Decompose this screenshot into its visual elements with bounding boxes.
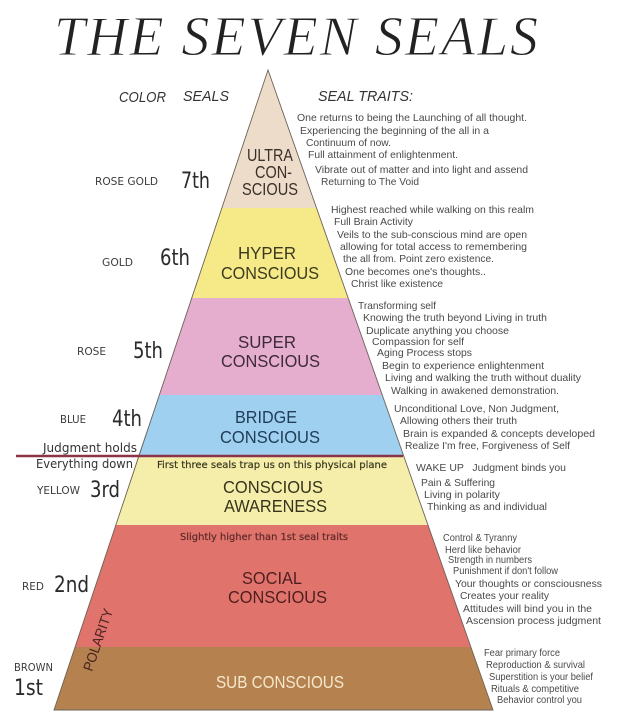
traits: 3rd seal [416,463,566,513]
traits: 7th seal: Continuum of now. [306,138,391,149]
traits: 2nd seal: Creates your reality [460,591,550,602]
traits: 3rd seal: WAKE UP Judgment binds you [416,463,566,474]
band: ultra conscious: ULTRA [247,145,293,165]
band: ultra conscious: SCIOUS [242,179,298,199]
seal 6 label: 6th [160,246,190,271]
band: conscious awareness: CONSCIOUS [223,477,323,497]
band: hyper conscious: CONSCIOUS [221,263,319,283]
traits: 6th seal [331,205,534,290]
band: conscious awareness: AWARENESS [224,496,327,516]
traits: 1st seal: Fear primary force [484,648,560,659]
traits: 3rd seal: Thinking as and individual [427,502,547,513]
traits: 4th seal: Allowing others their truth [400,416,517,427]
seal 4 label: 4th [112,407,142,432]
traits: 6th seal: the all from. Point zero existence. [343,254,494,265]
seal 1 label: 1st [14,676,43,701]
seal 3 label: 3rd [90,478,120,503]
seal 6 label: GOLD [102,256,133,269]
title: THE SEVEN SEALS [54,6,538,68]
traits: 5th seal: Knowing the truth beyond Living in truth [363,313,547,324]
seal 2 label [22,573,89,598]
pyramid edges [54,70,493,710]
column headers: COLOR [119,89,166,106]
traits: 5th seal [358,301,582,397]
judgment labels: Judgment holds [42,440,137,455]
band: social conscious: CONSCIOUS [228,587,327,607]
seal 2 label: RED [22,580,44,593]
traits: 6th seal: Full Brain Activity [334,217,414,228]
traits: 7th seal: Experiencing the beginning of the all in a [300,126,489,137]
traits: 6th seal: Highest reached while walking on this realm [331,205,534,216]
seal 1 label: BROWN [14,661,53,674]
band: super conscious: SUPER [238,332,296,352]
band: conscious awareness: First three seals trap us on this physical plane [157,460,387,471]
traits: 1st seal: Reproduction & survival [486,660,585,671]
traits: 6th seal: allowing for total access to remembering [340,242,527,253]
polarity label: POLARITY [80,606,116,673]
traits: 5th seal: Begin to experience enlightenment [382,361,544,372]
seal 2 label: 2nd [54,573,89,598]
band: super conscious: CONSCIOUS [221,351,320,371]
band: super conscious [159,298,382,395]
traits: 2nd seal [443,533,602,627]
traits: 2nd seal: Strength in numbers [448,555,532,566]
band: bridge conscious [138,395,404,456]
column headers: SEAL TRAITS: [318,88,413,105]
judgment labels: Everything down [36,456,133,471]
traits: 3rd seal: Living in polarity [424,490,501,501]
band: social conscious [75,525,471,647]
traits: 2nd seal: Attitudes will bind you in the [463,604,592,615]
traits: 5th seal: Living and walking the truth without duality [385,373,582,384]
band: bridge conscious: BRIDGE [235,407,297,427]
traits: 4th seal: Unconditional Love, Non Judgment, [394,404,559,415]
seal 7 label [95,169,210,194]
band: sub conscious: SUB CONSCIOUS [216,672,344,692]
band: hyper conscious [192,208,348,298]
traits: 1st seal: Rituals & competitive [491,684,579,695]
band: bridge conscious: CONSCIOUS [220,427,320,447]
traits: 7th seal: Vibrate out of matter and into light and assend [315,165,528,176]
traits: 2nd seal: Ascension process judgment [466,616,601,627]
traits: 2nd seal: Your thoughts or consciousness [455,579,602,590]
seal 5 label: ROSE [77,345,106,358]
traits: 4th seal: Realize I'm free, Forgiveness of Self [405,441,570,452]
traits: 7th seal: Returning to The Void [321,177,419,188]
column headers [119,88,413,106]
traits: 2nd seal: Herd like behavior [445,545,522,556]
seal 5 label [77,339,163,364]
seal 1 label [14,661,53,701]
traits: 4th seal: Brain is expanded & concepts developed [403,429,595,440]
traits: 2nd seal: Control & Tyranny [443,533,518,544]
traits: 2nd seal: Punishment if don't follow [453,566,559,577]
seal 5 label: 5th [133,339,163,364]
seal 6 label [102,246,190,271]
traits: 5th seal: Walking in awakened demonstration. [391,386,559,397]
judgment line [16,455,403,457]
band: hyper conscious: HYPER [238,243,296,263]
column headers: SEALS [183,88,229,105]
traits: 6th seal: One becomes one's thoughts.. [345,267,486,278]
traits: 7th seal: One returns to being the Launching of all thought. [297,113,527,124]
seal 4 label [60,407,142,432]
traits: 3rd seal: Pain & Suffering [421,478,495,489]
band: social conscious: SOCIAL [242,568,302,588]
traits: 5th seal: Duplicate anything you choose [366,326,509,337]
band: sub conscious [54,647,493,710]
seal colors and numbers [14,169,210,701]
traits: 4th seal [394,404,595,452]
traits: 6th seal: Christ like existence [351,279,443,290]
traits: 1st seal: Behavior control you [497,695,582,706]
pyramid [54,70,493,710]
traits: 1st seal: Superstition is your belief [489,672,593,683]
traits: 5th seal: Compassion for self [372,337,464,348]
band: ultra conscious [222,70,316,208]
band: social conscious: Slightly higher than 1st seal traits [180,532,348,543]
traits: 7th seal [297,113,528,188]
judgment labels [36,440,137,471]
traits: 5th seal: Transforming self [358,301,436,312]
traits: 6th seal: Veils to the sub-conscious mind are open [337,230,527,241]
traits: 5th seal: Aging Process stops [377,348,472,359]
seal 4 label: BLUE [60,413,86,426]
traits: 1st seal [484,648,593,706]
band: ultra conscious: CON- [255,162,292,182]
seal 7 label: 7th [181,169,210,194]
seal traits text [297,113,602,706]
seal 3 label [36,478,120,503]
traits: 7th seal: Full attainment of enlightenment. [308,150,458,161]
band: conscious awareness [116,456,428,525]
seal 7 label: ROSE GOLD [95,175,158,188]
seal 3 label: YELLOW [36,484,80,497]
